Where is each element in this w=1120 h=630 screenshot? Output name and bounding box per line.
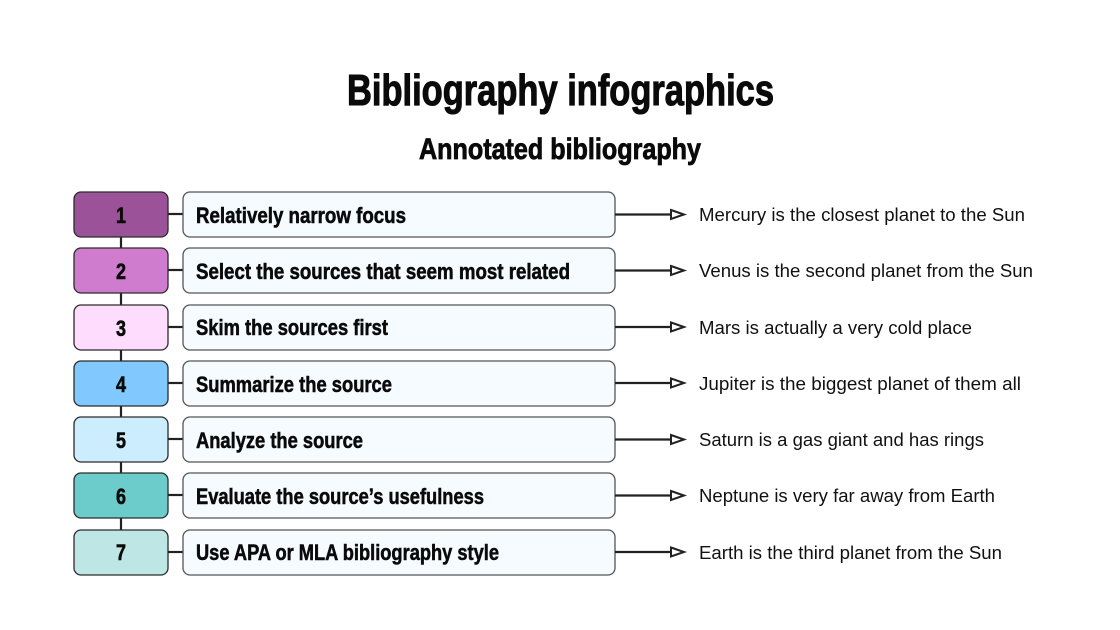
number box 6 (74, 473, 168, 518)
connector 1 (168, 213, 183, 215)
number box 6: 6 (116, 484, 126, 509)
description 2: Venus is the second planet from the Sun (699, 261, 1033, 281)
number box 1 (74, 192, 168, 237)
step 2 (74, 248, 1033, 293)
number box 3: 3 (116, 316, 126, 341)
heading box 3 (183, 305, 615, 350)
number box 5: 5 (116, 428, 126, 453)
arrow 6 (615, 491, 684, 500)
number box 2: 2 (116, 259, 126, 284)
arrow 2 (615, 266, 684, 275)
heading box 1: Relatively narrow focus (196, 203, 406, 228)
number box 2 (74, 248, 168, 293)
vertical connector (120, 236, 122, 531)
connector 3 (168, 326, 183, 328)
heading box 4 (183, 361, 615, 406)
step 6 (74, 473, 995, 518)
heading box 7: Use APA or MLA bibliography style (196, 540, 499, 565)
number box 4: 4 (116, 372, 127, 397)
arrow 1 (615, 210, 684, 219)
description 4: Jupiter is the biggest planet of them all (699, 374, 1021, 394)
connector 6 (168, 494, 183, 496)
step 1 (74, 192, 1025, 237)
number box 4 (74, 361, 168, 406)
step 5 (74, 417, 984, 462)
heading box 2 (183, 248, 615, 293)
title: Bibliography infographics (347, 66, 774, 115)
heading box 5: Analyze the source (196, 428, 363, 453)
arrow 7 (615, 548, 684, 556)
heading box 2: Select the sources that seem most related (196, 259, 570, 284)
description 7: Earth is the third planet from the Sun (699, 543, 1002, 563)
arrow 5 (615, 435, 684, 444)
number box 1: 1 (116, 203, 126, 228)
description 5: Saturn is a gas giant and has rings (699, 430, 984, 450)
heading box 5 (183, 417, 615, 462)
number box 7 (74, 530, 168, 575)
heading box 1 (183, 192, 615, 237)
arrow 4 (615, 378, 684, 388)
step 3 (74, 305, 972, 350)
heading box 3: Skim the sources first (196, 315, 388, 340)
heading box 7 (183, 530, 615, 575)
heading box 6 (183, 473, 615, 518)
description 6: Neptune is very far away from Earth (699, 486, 995, 506)
number box 7: 7 (116, 540, 126, 565)
connector 4 (168, 382, 183, 384)
number box 5 (74, 417, 168, 462)
description 3: Mars is actually a very cold place (699, 318, 972, 338)
number box 3 (74, 305, 168, 350)
step 7 (74, 530, 1002, 575)
heading box 6: Evaluate the source’s usefulness (196, 484, 484, 509)
connector 2 (168, 269, 183, 271)
arrow 3 (615, 322, 684, 332)
subtitle: Annotated bibliography (419, 133, 701, 166)
description 1: Mercury is the closest planet to the Sun (699, 205, 1025, 225)
connector 7 (168, 551, 183, 553)
connector 5 (168, 438, 183, 440)
step 4 (74, 361, 1021, 406)
heading box 4: Summarize the source (196, 372, 392, 397)
